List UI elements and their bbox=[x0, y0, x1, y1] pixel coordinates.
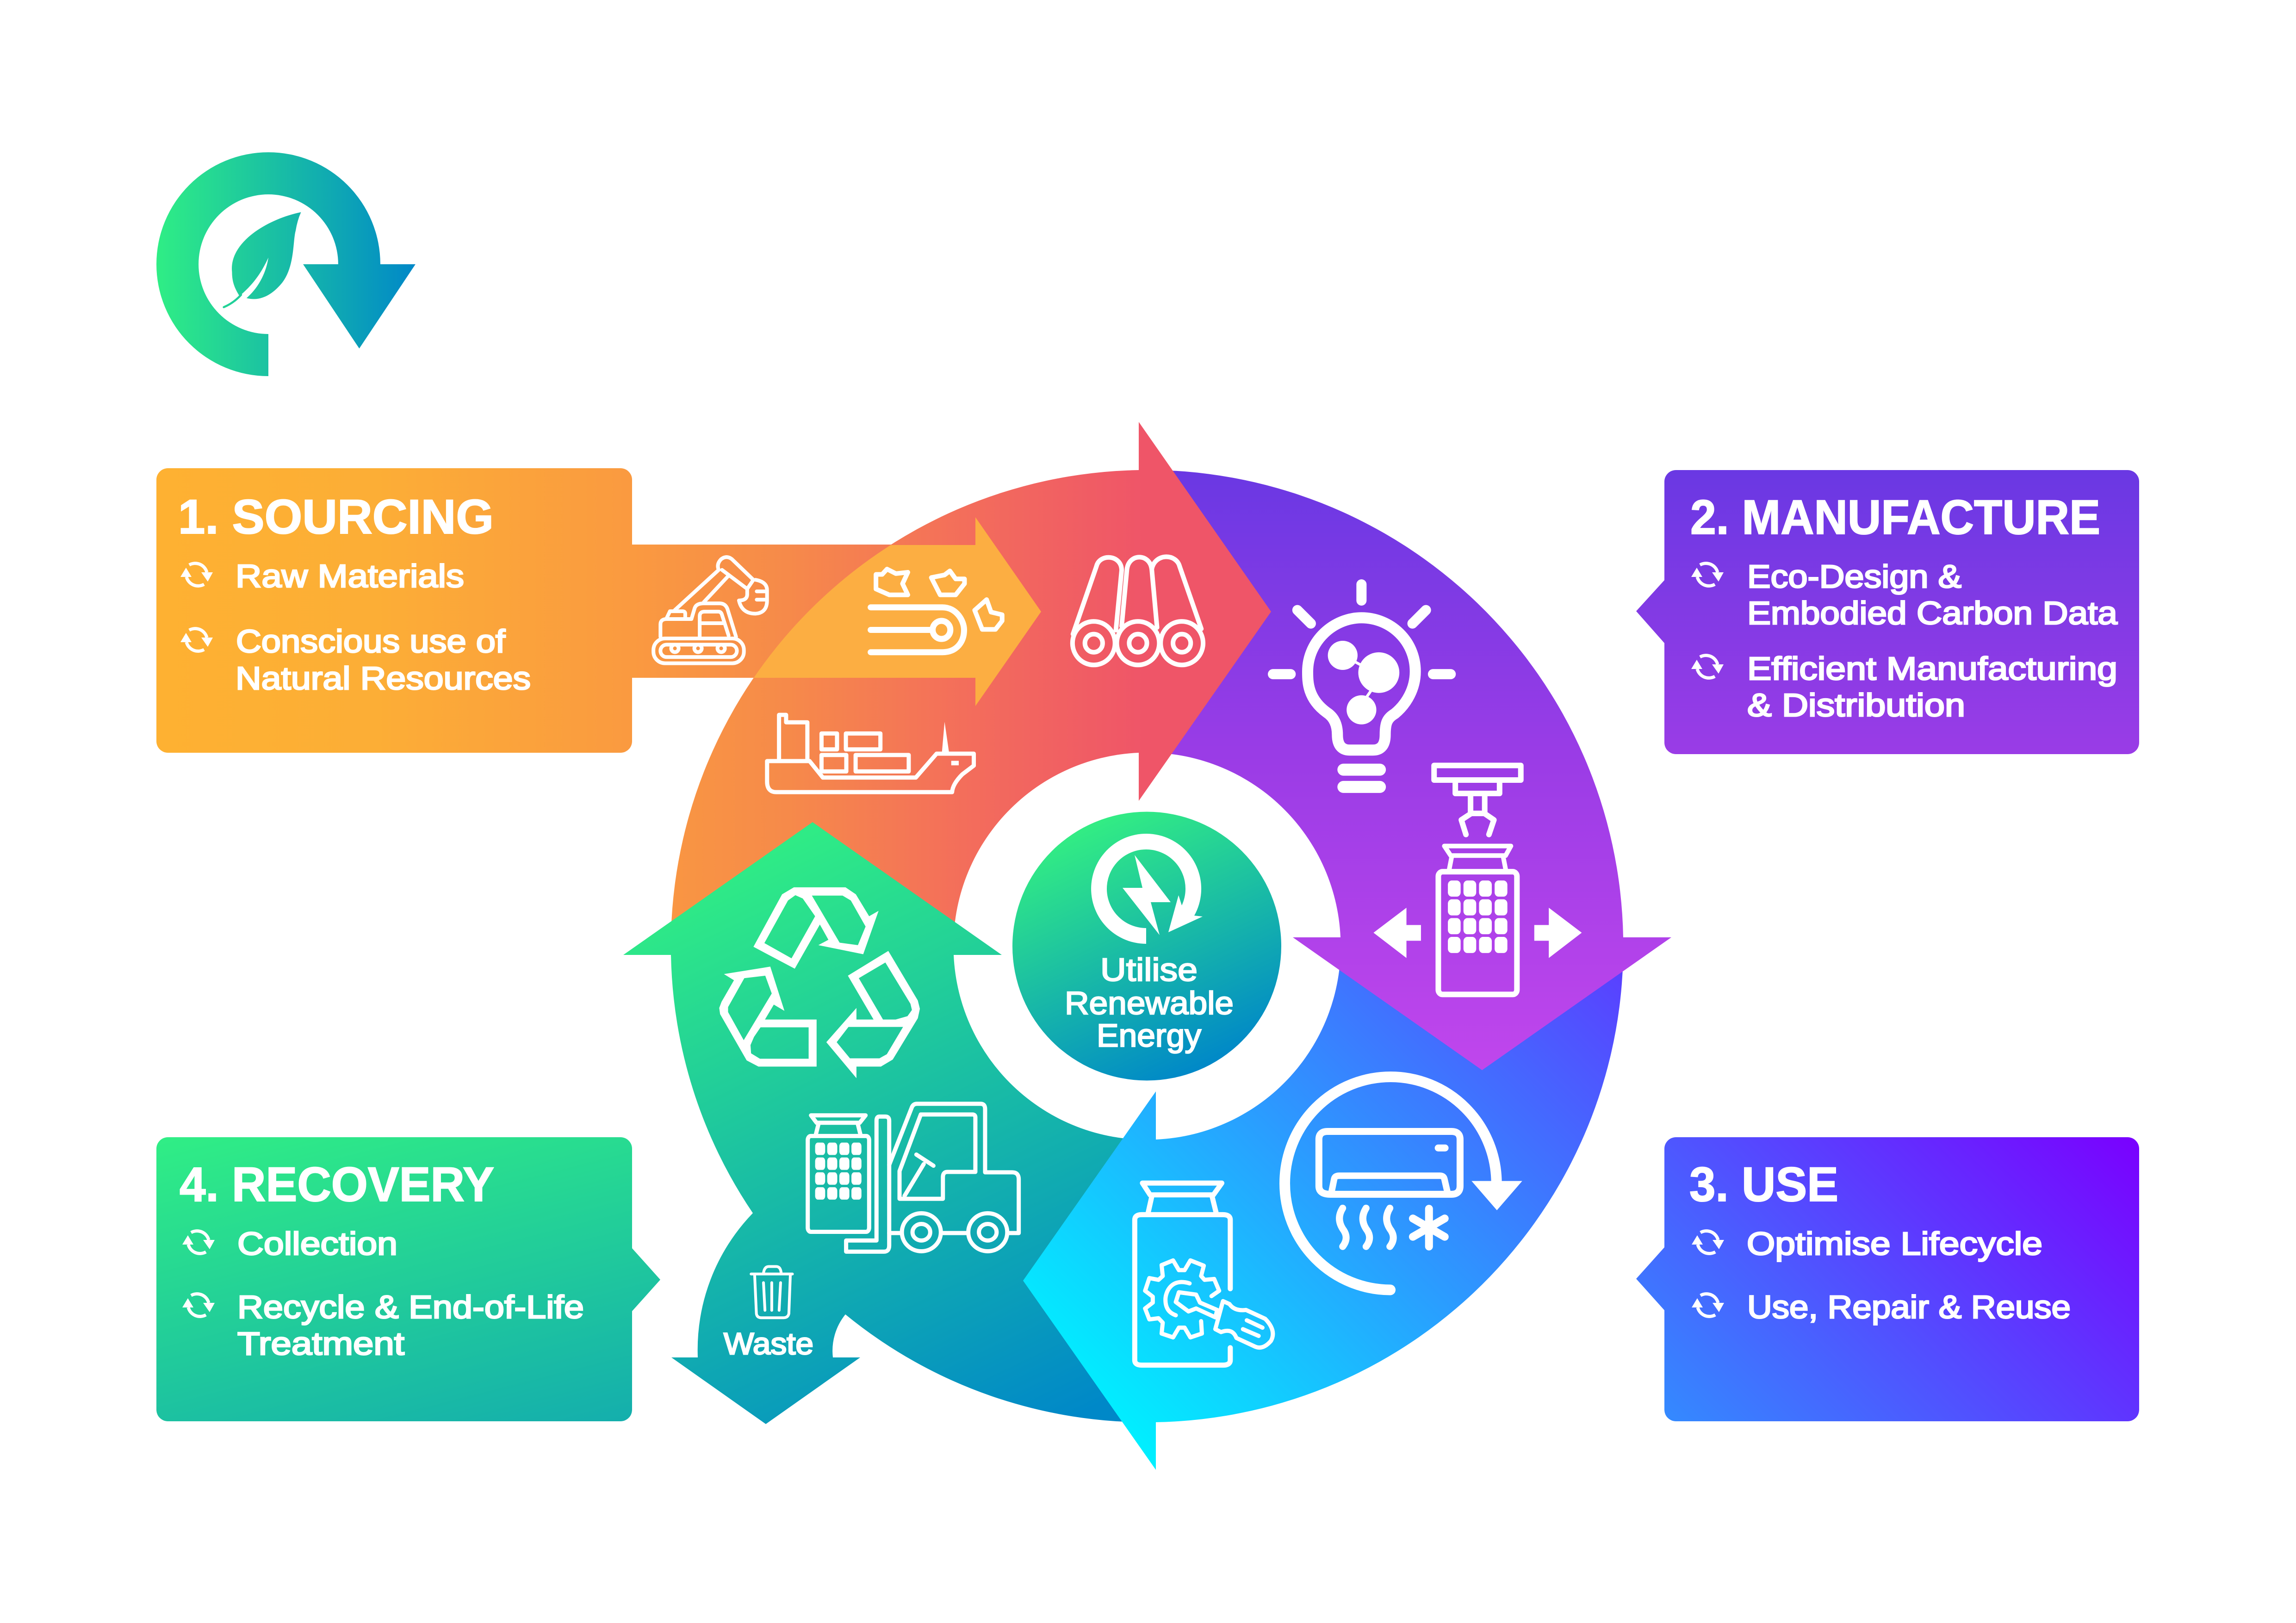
icon: conveyor with rocks bbox=[871, 569, 1002, 652]
text: use, repair and reuse: Use, Repair & Reuse bbox=[1747, 1289, 2071, 1325]
icon: trash can bbox=[751, 1267, 793, 1318]
arrow head: sourcing to manufacture bbox=[1139, 422, 1271, 801]
panel: 2. manufacture bbox=[1636, 470, 2139, 754]
logo: recycling arrow with leaf bbox=[156, 152, 416, 376]
icon: pipes bbox=[1073, 557, 1203, 665]
icon: forklift with jar bbox=[808, 1104, 1019, 1251]
heading: use: 3. USE bbox=[1689, 1158, 1838, 1212]
panel: 4. recovery bbox=[156, 1137, 660, 1421]
arrow head: recovery to sourcing bbox=[623, 822, 1002, 955]
icon: left arrow bbox=[1373, 908, 1421, 958]
icon: refresh bbox=[1692, 1294, 1724, 1316]
icon: light bulb with molecule bbox=[1273, 584, 1451, 787]
gold inner arrow bbox=[754, 517, 1041, 706]
icon: cargo ship bbox=[767, 715, 974, 792]
text: raw materials: Raw Materials bbox=[236, 558, 464, 594]
ring segment: sourcing bbox=[671, 470, 1139, 955]
icon: refresh bbox=[1691, 564, 1724, 586]
text: recycle and end-of-life treatment: Recycle & End-of-Life bbox=[237, 1289, 584, 1325]
panel: 3. use bbox=[1636, 1137, 2139, 1421]
heading: sourcing: 1. SOURCING bbox=[178, 490, 494, 544]
text: collection: Collection bbox=[237, 1226, 397, 1262]
heading: manufacture: 2. MANUFACTURE bbox=[1690, 490, 2100, 545]
text: eco-design and embodied carbon data: Eco-Design & bbox=[1747, 558, 1961, 595]
icon: refresh bbox=[180, 564, 213, 586]
ring segment: use bbox=[1156, 937, 1623, 1422]
text: recycle and end-of-life treatment: Treatment bbox=[237, 1326, 404, 1362]
ring segment: manufacture bbox=[1139, 470, 1623, 937]
icon: energy bolt in cycle arrow bbox=[1091, 834, 1203, 944]
label: waste: Waste bbox=[724, 1326, 813, 1361]
text: utilise renewable energy: Utilise bbox=[1100, 952, 1198, 988]
icon: refresh bbox=[1691, 656, 1724, 678]
icon: right arrow bbox=[1534, 908, 1582, 958]
text: utilise renewable energy: Renewable bbox=[1065, 985, 1234, 1021]
text: efficient manufacturing and distribution: Efficient Manufacturing bbox=[1747, 650, 2117, 687]
icon: air conditioner with cycle arrow bbox=[1285, 1077, 1522, 1290]
icon: refresh bbox=[182, 1294, 215, 1316]
icon: refresh bbox=[182, 1231, 215, 1253]
ring segment: recovery with waste arrow bbox=[671, 955, 1156, 1424]
text: optimise lifecycle: Optimise Lifecycle bbox=[1747, 1226, 2042, 1262]
panel: 1. sourcing bbox=[156, 468, 895, 753]
text: eco-design and embodied carbon data: Embodied Carbon Data bbox=[1747, 595, 2117, 631]
text: conscious use of natural resources: Natural Resources bbox=[236, 660, 531, 696]
icon: robot claw over jar bbox=[1434, 765, 1521, 994]
icon: jar with gear and wrench bbox=[1135, 1183, 1273, 1365]
icon: excavator bbox=[653, 557, 767, 663]
text: efficient manufacturing and distribution: & Distribution bbox=[1747, 687, 1965, 723]
arrow head: use to recovery bbox=[1023, 1091, 1156, 1470]
icon: refresh bbox=[180, 629, 213, 651]
heading: recovery: 4. RECOVERY bbox=[180, 1158, 494, 1212]
center circle: utilise renewable energy bbox=[1012, 812, 1281, 1081]
icon: refresh bbox=[1692, 1231, 1724, 1253]
text: utilise renewable energy: Energy bbox=[1097, 1017, 1201, 1053]
arrow head: manufacture to use bbox=[1293, 937, 1671, 1070]
text: conscious use of natural resources: Conscious use of bbox=[236, 623, 506, 659]
icon: recycling symbol bbox=[719, 887, 920, 1078]
